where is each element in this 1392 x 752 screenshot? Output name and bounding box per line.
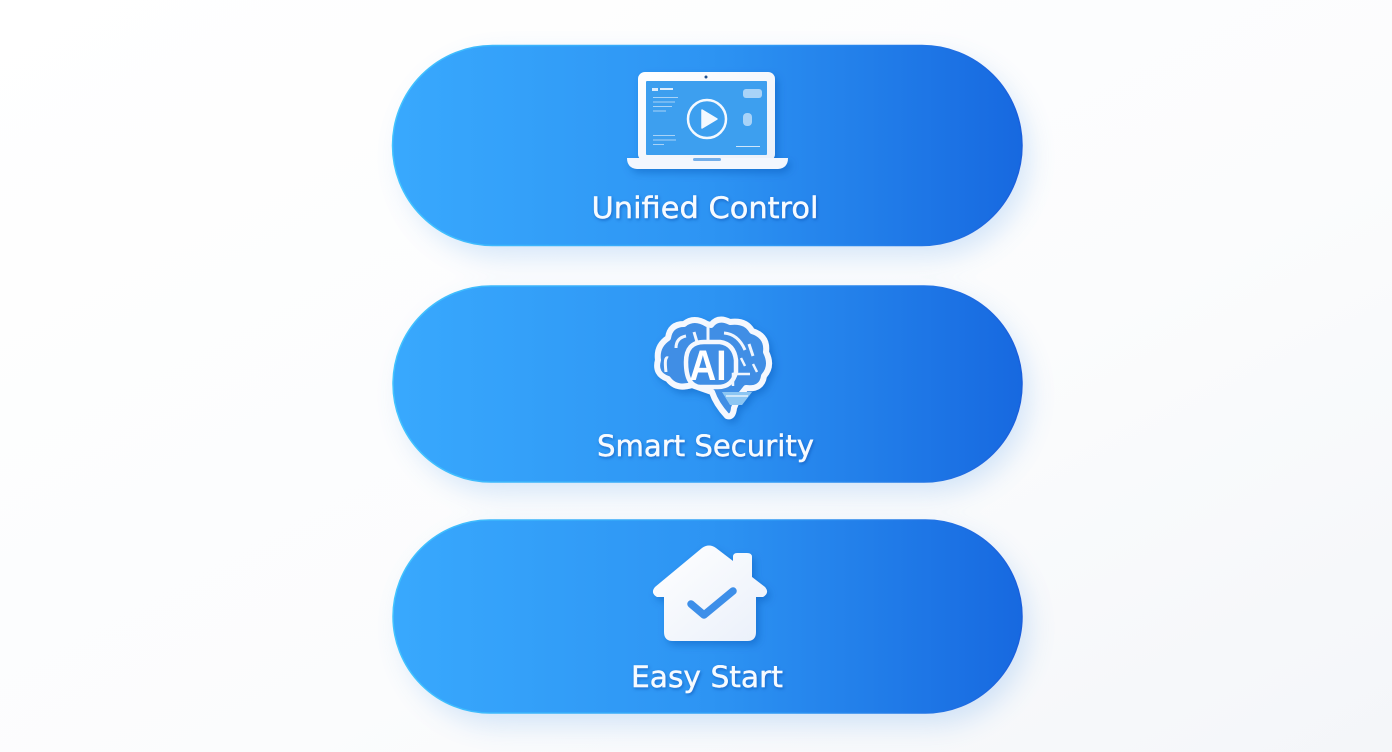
icon: laptop with play button	[627, 72, 788, 169]
panel: Smart Security	[393, 286, 1022, 482]
label: Easy Start: Easy Start	[631, 660, 783, 694]
panel: Easy Start	[393, 520, 1022, 713]
icon: AI brain	[657, 320, 769, 416]
icon: house with check mark	[653, 546, 767, 641]
text: AI: AI	[690, 342, 726, 390]
label: Smart Security: Smart Security	[597, 429, 814, 463]
pill shadows	[404, 58, 1028, 724]
panel: Unified Control	[392, 46, 1022, 246]
label: Unified Control: Unified Control	[592, 191, 818, 225]
